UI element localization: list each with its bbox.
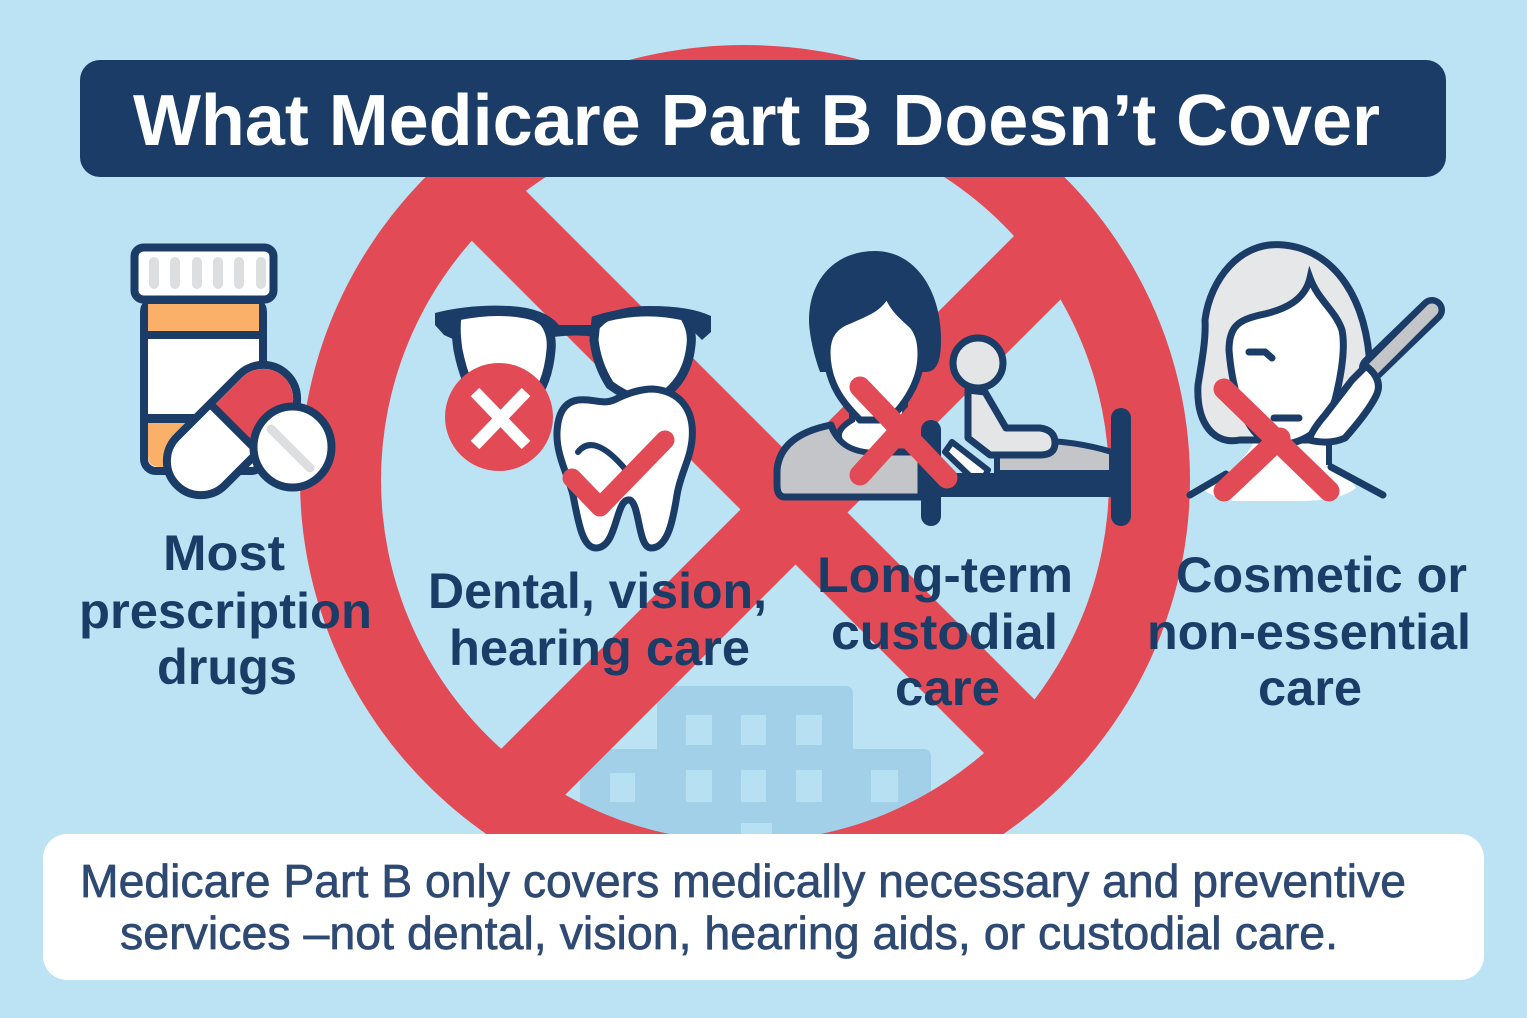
blanket <box>997 440 1112 473</box>
label: long-term custodial care: care <box>895 660 1000 716</box>
neck <box>1326 440 1332 465</box>
label: most prescription drugs: drugs <box>157 639 297 695</box>
label: most prescription drugs: Most <box>163 525 285 581</box>
icon: patient in bed <box>777 251 1131 526</box>
icon: medicine bottle and pills <box>134 248 332 509</box>
tooth <box>557 389 692 548</box>
bottle body <box>144 300 263 471</box>
note text: services –not dental, vision, hearing aids, or custodial care. <box>120 907 1338 959</box>
bottom note panel <box>43 834 1484 980</box>
carer face <box>827 293 921 420</box>
hair <box>1198 245 1370 441</box>
carer shoulders <box>777 425 921 497</box>
red x <box>860 387 947 478</box>
label: long-term custodial care: custodial <box>831 604 1058 660</box>
carer neck <box>839 400 905 453</box>
glasses <box>435 306 711 405</box>
label: cosmetic or non-essential care: non-essential <box>1147 604 1471 660</box>
eye <box>1249 352 1272 358</box>
title banner <box>80 60 1446 177</box>
bed frame <box>921 408 1131 526</box>
red x badge <box>445 363 553 471</box>
label: dental, vision, hearing care: hearing care <box>449 620 750 676</box>
bottle cap <box>134 248 274 300</box>
red x <box>1224 389 1329 491</box>
label: cosmetic or non-essential care: Cosmetic or <box>1176 547 1467 603</box>
shoulders <box>1190 467 1383 495</box>
hospital building silhouette <box>580 686 931 835</box>
title: What Medicare Part B Doesn’t Cover <box>133 81 1380 161</box>
mouth <box>1274 414 1299 422</box>
round tablet <box>254 406 332 488</box>
prohibition sign <box>300 45 1190 834</box>
label: cosmetic or non-essential care: care <box>1258 660 1362 716</box>
chest <box>1202 440 1356 501</box>
capsule <box>153 351 311 509</box>
carer hair <box>809 251 941 372</box>
label: long-term custodial care: Long-term <box>817 547 1073 603</box>
icon: cosmetic patient <box>1190 245 1432 501</box>
note text: Medicare Part B only covers medically necessary and preventive <box>80 855 1406 907</box>
label: dental, vision, hearing care: Dental, vision, <box>428 563 767 619</box>
icon: glasses and tooth <box>435 306 711 548</box>
small patient <box>945 338 1055 476</box>
label: most prescription drugs: prescription <box>79 583 372 639</box>
face <box>1229 278 1343 445</box>
scalpel <box>1309 310 1432 442</box>
